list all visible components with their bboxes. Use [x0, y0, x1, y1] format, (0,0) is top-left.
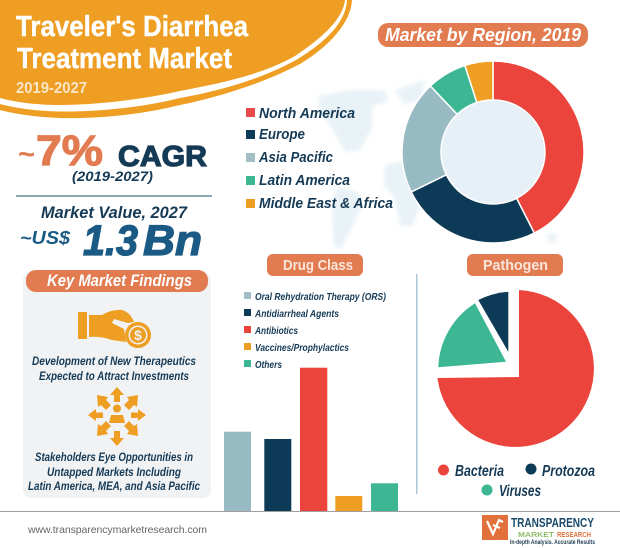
legend: drug class: Vaccines/Prophylactics [255, 342, 349, 354]
CAGR stat: CAGR [118, 141, 207, 173]
title: Traveler's Diarrhea [16, 11, 249, 43]
market value stat: Bn [143, 217, 202, 265]
text: finding two: Untapped Markets Including [47, 465, 182, 479]
title [16, 11, 249, 97]
logo: transparency market research: TRANSPARENCY [511, 515, 594, 530]
legend: drug class: Antidiarrheal Agents [254, 308, 339, 320]
legend: regions: Asia Pacific [258, 149, 334, 166]
heading: drug class [267, 254, 363, 276]
footer url: www.transparencymarketresearch.com [27, 524, 207, 536]
world map background [318, 80, 557, 250]
text: finding one [32, 354, 196, 383]
logo: transparency market research [482, 515, 596, 546]
legend: regions: Latin America [259, 172, 350, 189]
text: finding two: Latin America, MEA, and Asia Pacific [28, 479, 200, 493]
legend: pathogen: Bacteria [455, 463, 504, 480]
icon: hand with coin: $ [134, 327, 142, 343]
donut centre map tint [440, 99, 546, 205]
market value stat: 1.3 [83, 217, 138, 265]
logo: transparency market research: RESEARCH [557, 532, 591, 539]
legend: drug class: Oral Rehydration Therapy (ORS) [255, 291, 386, 303]
heading: drug class: Drug Class [283, 257, 353, 274]
legend: drug class [244, 291, 386, 371]
legend: drug class: Others [255, 359, 282, 371]
text: finding one: Development of New Therapeutics [32, 354, 196, 368]
icon: hand with coin [78, 310, 151, 348]
legend: pathogen: Viruses [499, 483, 541, 500]
logo: transparency market research: In-depth Analysis. Accurate Results [510, 540, 596, 546]
text: finding two [28, 450, 200, 493]
legend: regions: North America [259, 105, 355, 122]
text: finding one: Expected to Attract Investments [39, 369, 189, 383]
CAGR stat: ~ [18, 138, 35, 171]
title: Treatment Market [17, 43, 232, 75]
text: finding two: Stakeholders Eye Opportunities in [35, 450, 193, 464]
icon: person with outward arrows [88, 387, 146, 446]
CAGR stat: 7% [36, 127, 103, 175]
icon: logo mark [482, 515, 508, 540]
legend: pathogen [438, 463, 595, 500]
legend: drug class: Antibiotics [254, 325, 298, 337]
heading: key market findings: Key Market Findings [47, 271, 192, 290]
heading: pathogen: Pathogen [483, 257, 548, 274]
title: 2019-2027 [16, 80, 87, 97]
legend: regions: Middle East & Africa [259, 195, 393, 212]
heading: pathogen [467, 254, 563, 276]
CAGR stat [18, 127, 207, 184]
market value stat: Market Value, 2027 [41, 203, 188, 222]
CAGR stat: (2019-2027) [72, 168, 153, 184]
logo: transparency market research: MARKET [518, 532, 555, 539]
header banner [0, 0, 352, 118]
bar chart: drug class [224, 368, 398, 511]
panel: key market findings [23, 270, 211, 498]
legend: regions [246, 105, 393, 212]
market value stat [20, 203, 202, 265]
market value stat: ~US$ [20, 228, 71, 248]
legend: pathogen: Protozoa [542, 463, 595, 480]
heading: market by region: Market by Region, 2019 [385, 25, 581, 45]
legend: regions: Europe [259, 126, 305, 143]
donut chart: market by region [402, 61, 584, 243]
pie chart: pathogen [438, 290, 594, 447]
